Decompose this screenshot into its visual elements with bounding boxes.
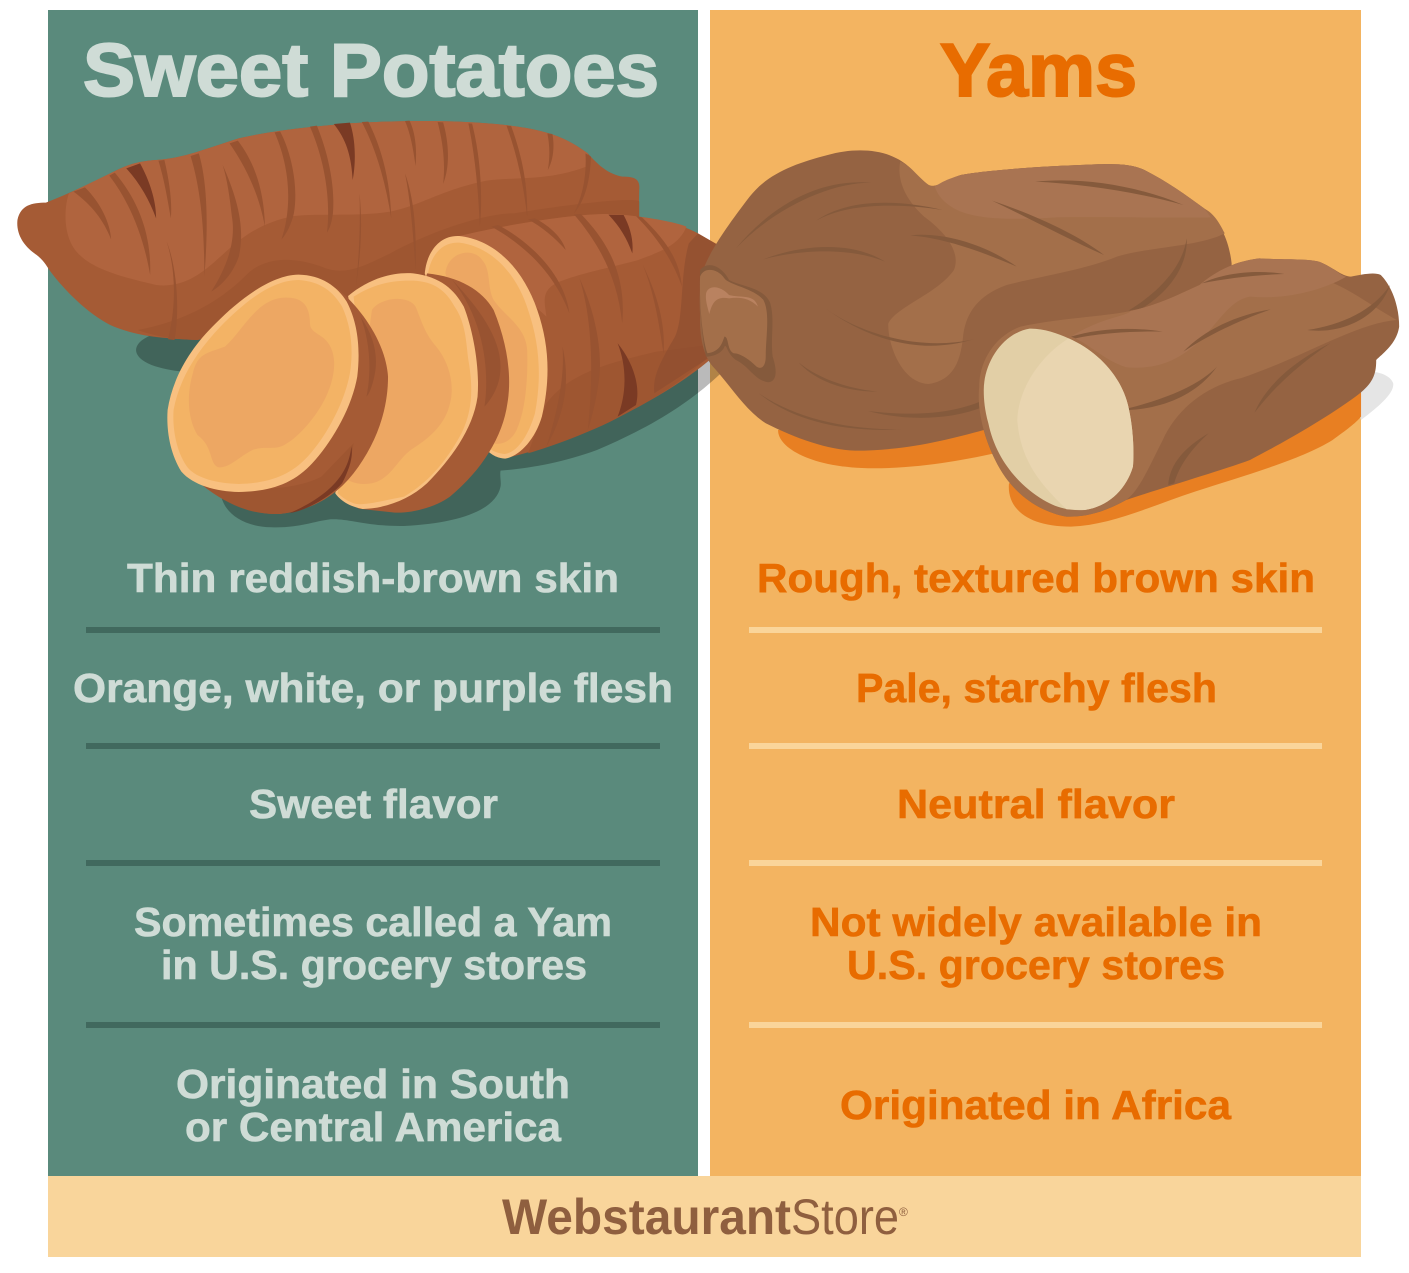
heading: Yams: Yams	[940, 28, 1137, 112]
text: origin: Originated in South	[176, 1061, 570, 1107]
logo: WebstaurantStore: ®	[899, 1205, 908, 1219]
text: origin	[176, 1061, 570, 1150]
text: flavor: Sweet flavor	[249, 781, 498, 827]
cut yam	[979, 258, 1399, 517]
text: origin: or Central America	[185, 1104, 562, 1150]
text: availability: U.S. grocery stores	[847, 942, 1225, 988]
logo: WebstaurantStore: Store	[791, 1189, 899, 1245]
text: flavor: Neutral flavor	[897, 781, 1175, 827]
front sweet potato	[459, 214, 721, 458]
text: name in grocery stores	[134, 899, 612, 988]
panel: yams	[710, 10, 1361, 1176]
back sweet potato	[17, 121, 639, 340]
text: flesh: Pale, starchy flesh	[856, 665, 1217, 711]
logo: WebstaurantStore: Webstaurant	[502, 1189, 791, 1245]
heading: Sweet Potatoes: Sweet Potatoes	[83, 28, 659, 112]
panel: sweet potatoes	[48, 10, 698, 1176]
text: name in grocery stores: in U.S. grocery stores	[161, 942, 587, 988]
text: skin: Thin reddish-brown skin	[127, 555, 619, 601]
illustration: sweet potatoes	[17, 121, 721, 527]
slice: front	[167, 275, 388, 514]
slice: middle	[335, 273, 509, 513]
text: name in grocery stores: Sometimes called a Yam	[134, 899, 612, 945]
large yam	[700, 150, 1232, 451]
text: skin: Rough, textured brown skin	[757, 555, 1315, 601]
slice: back	[425, 236, 548, 459]
text: flesh: Orange, white, or purple flesh	[73, 665, 673, 711]
text: availability: Not widely available in	[810, 899, 1262, 945]
text: availability	[810, 899, 1262, 988]
yam knob	[700, 265, 776, 382]
footer band with logo	[48, 1176, 1361, 1257]
text: origin: Originated in Africa	[840, 1082, 1232, 1128]
illustration: yams	[700, 150, 1399, 527]
